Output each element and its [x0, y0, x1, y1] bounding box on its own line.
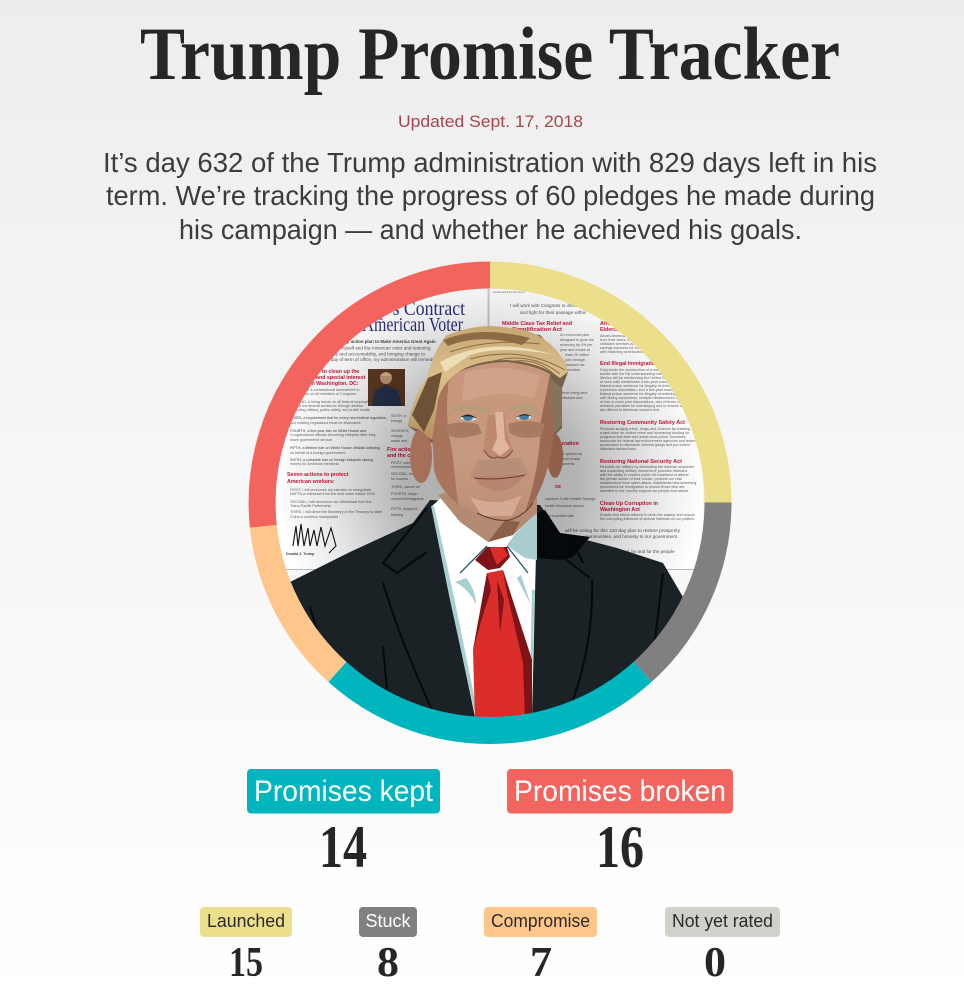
contract centre column: THIRD, cancel all	[391, 485, 420, 489]
contract left column: FIFTH, a lifetime ban on White House officials lobbying	[290, 446, 380, 450]
signature	[293, 524, 336, 553]
contract far-right column: from their taxes, incentivizes	[600, 338, 647, 342]
necktie	[460, 546, 532, 720]
contract left column: money for American elections.	[290, 462, 339, 466]
contract centre column: SECOND, begin	[391, 472, 418, 476]
contract right column: year and create at	[560, 348, 590, 352]
stat: launched: Launched	[207, 911, 285, 931]
contract far-right column: Washington Act	[600, 507, 640, 513]
contract centre column: FOURTH, begin	[391, 492, 417, 496]
contract far-right column: Fully-funds the construction of a wall on our southern	[600, 368, 686, 372]
contract far-right column: a task force on violent crime and increasing funding for	[600, 431, 690, 435]
neck	[438, 492, 537, 542]
contract left column: Congressional officials becoming lobbyists after they	[290, 433, 376, 437]
updated date: Updated Sept. 17, 2018	[398, 112, 583, 131]
contract far-right column: a previous deportation, and a five-year mandatory	[600, 388, 682, 392]
contract right column: and options for	[558, 452, 583, 456]
stat: not yet rated: Not yet rated	[672, 911, 773, 931]
head shadow on document	[276, 289, 703, 570]
contract heading: Trump’s Contract	[340, 298, 465, 320]
ring: compromise	[263, 526, 337, 672]
contract right column: from being sent	[562, 391, 587, 395]
contract far-right column: federal prison sentence for illegally re-entering for	[600, 392, 682, 396]
stat: not yet rated: 0	[704, 940, 726, 986]
contract far-right column: with the ability to receive public VA treatment or attend	[600, 473, 688, 477]
contract right column: continued from the front	[493, 290, 525, 294]
ring: kept	[337, 672, 643, 730]
contract right column: An economic plan	[560, 333, 589, 337]
hair top	[408, 326, 568, 440]
contract left column: two existing regulations must be eliminated.	[290, 421, 361, 425]
contract right column: replaces it with Health Savings	[545, 497, 595, 501]
contract far-right column: Reduces surging crime, drugs and violence by creating	[600, 427, 690, 431]
contract right column: Simplification Act	[512, 327, 562, 333]
small photo	[368, 369, 405, 406]
contract far-right column: with matching contributions	[600, 350, 645, 354]
stat: promises broken: 16	[596, 814, 644, 880]
contract right column	[493, 290, 681, 554]
contract far-right column	[600, 321, 697, 521]
contract centre column: and the co	[387, 453, 414, 459]
contract heading: the American Voter	[340, 314, 463, 336]
contract far-right column: Allows Americans to deduct	[600, 334, 645, 338]
contract far-right column: Eldercare Act	[600, 327, 634, 333]
shirt	[432, 490, 537, 717]
contract far-right column: resources for federal law enforcement agencies and federal	[600, 439, 697, 443]
mouth	[474, 474, 525, 491]
contract right column: ucation	[560, 441, 579, 447]
contract far-right column: border with the full understanding that the country	[600, 372, 681, 376]
contract centre column: water and	[391, 439, 407, 443]
contract left column: in Washington, DC:	[310, 381, 359, 387]
contract centre column: FIFTH, suspend	[391, 507, 417, 511]
contract far-right column: infrastructure from cyber-attack; establishes new screening	[600, 481, 696, 485]
contract right column: and fight for their passage within	[520, 310, 587, 315]
contract centre column: training	[391, 513, 403, 517]
contract left column: propose a constitutional amendment to	[296, 388, 360, 392]
stat: promises kept: Promises kept	[254, 775, 434, 808]
contract left column: Seven actions to protect	[287, 472, 349, 478]
face	[432, 362, 554, 520]
contract centre column: for Access	[391, 477, 408, 481]
contract left column	[286, 339, 444, 556]
contract far-right column: Affordable Childcare	[600, 321, 652, 327]
contract left column: between myself and the American voter and restoring	[322, 346, 431, 350]
ring: stuck	[643, 502, 718, 672]
contract centre column: energy	[391, 419, 402, 423]
contract left column: first day of term of office, my administration will immediately	[322, 357, 444, 362]
stat: compromise: 7	[530, 940, 552, 986]
contract far-right column: of such wall; establishes a two-year mandatory	[600, 380, 677, 384]
contract centre column: SIXTH, a	[391, 414, 407, 418]
donut ring	[262, 275, 718, 730]
contract right column: school choice	[558, 457, 580, 461]
stat: not yet rated	[665, 907, 780, 986]
contract far-right column: programs that train and assist local police; increases	[600, 435, 686, 439]
contract left column: THIRD, a requirement that for every new federal regulation,	[290, 416, 387, 420]
title: Trump Promise Tracker	[140, 13, 840, 96]
stat: stuck: 8	[377, 940, 399, 986]
intro text: his campaign — and whether he achieved his goals.	[179, 214, 802, 245]
stat: stuck	[359, 907, 417, 986]
contract far-right column: federal prison sentence for illegally re-entering	[600, 384, 676, 388]
contract far-right column: childcare services and creates	[600, 342, 650, 346]
contract left column: NAFTA or withdraw from the deal under Article 2205	[290, 492, 375, 496]
contract left column: reduce the federal workforce through attrition	[290, 404, 363, 408]
contract right column: massive tax	[565, 363, 585, 367]
contract left column: excluding military, public safety, and public health	[290, 408, 370, 412]
contract far-right column: Rebuilds our military by eliminating the defense sequester	[600, 465, 695, 469]
contract left column: term limits on all members of Congress	[292, 392, 356, 396]
contract far-right column: enhance penalties for overstaying and to ensure open	[600, 404, 688, 408]
lapel lines	[310, 508, 663, 712]
contract right column: designed to grow the	[560, 338, 594, 342]
stat: launched: 15	[229, 940, 263, 986]
contract far-right column: prosecutors to dismantle criminal gangs and put violent	[600, 443, 690, 447]
contract left column: FOURTH, a five-year ban on White House and	[290, 429, 366, 433]
contract right column: of, by and for the people	[625, 549, 675, 554]
contract left column: 100-day action plan to Make America Great Again	[333, 339, 436, 344]
intro text	[103, 147, 877, 245]
contract left column: SECOND, a hiring freeze on all federal employees	[290, 400, 372, 404]
ring: broken	[262, 275, 490, 526]
contract far-right column: or two or more prior deportations; also reforms visa	[600, 400, 684, 404]
contract left column: leave government service.	[290, 438, 333, 442]
contract left column: Donald J. Trump	[286, 552, 315, 556]
stat: stuck: Stuck	[366, 911, 411, 931]
contract centre column: SEVENTH,	[391, 429, 409, 433]
contract centre column: FIRST, cancel	[391, 461, 414, 465]
stat: compromise	[484, 907, 597, 986]
contract right column: economy by 4% per	[560, 343, 593, 347]
contract centre column: change	[391, 434, 403, 438]
contract centre column	[387, 414, 424, 517]
contract far-right column: Clean Up Corruption in	[600, 501, 658, 507]
contract right column: reduction	[565, 368, 580, 372]
document backdrop	[276, 289, 703, 570]
hair back and sides	[408, 327, 568, 445]
stat: launched	[200, 907, 292, 986]
stat: promises kept: 14	[319, 814, 367, 880]
contract right column: ce	[555, 484, 561, 490]
ring: launched	[490, 275, 718, 502]
stat: promises broken: Promises broken	[514, 775, 726, 808]
contract right column: will be voting for this 100-day plan to restore prosperity	[565, 528, 681, 533]
contract far-right column: Mexico will be reimbursing the United States for	[600, 376, 679, 380]
contract left column: Trans-Pacific Partnership	[290, 504, 331, 508]
intro text: term. We’re tracking the progress of 60 pledges he made during	[106, 180, 875, 211]
shirt edge shading	[431, 506, 590, 710]
contract far-right column: Restoring Community Safety Act	[600, 420, 685, 426]
contract right column: least 25 million	[565, 353, 589, 357]
stat: compromise: Compromise	[491, 911, 590, 931]
contract far-right column: are offered to American workers first.	[600, 408, 660, 412]
contract right column: to parents	[558, 462, 575, 466]
contract far-right column: with felony convictions, multiple misdemeanor convictions	[600, 396, 694, 400]
contract left column: honesty and accountability, and bringing change to	[322, 352, 426, 356]
contract far-right column: savings accounts for both	[600, 346, 642, 350]
contract far-right column: Enacts new ethics reforms to drain the swamp and reduce	[600, 513, 695, 517]
portrait illustration	[276, 289, 703, 760]
contract heading	[362, 302, 465, 332]
contract right column: I will work with Congress to introduce	[510, 303, 586, 308]
contract far-right column: offenders behind bars.	[600, 447, 637, 451]
contract centre column: memorandum	[391, 465, 414, 469]
eyes	[459, 414, 533, 421]
contract left column: American workers:	[287, 479, 335, 485]
contract far-right column: and expanding military investment; provides Veterans	[600, 469, 687, 473]
contract far-right column: End Illegal Immigration Act	[600, 361, 668, 367]
contract left column: FIRST, I will announce my intention to renegotiate	[290, 488, 371, 492]
contract right column: Middle Class Tax Relief and	[502, 321, 572, 327]
contract right column: jobs through	[564, 358, 585, 362]
contract far-right column: Restoring National Security Act	[600, 459, 682, 465]
eyebrows	[447, 403, 542, 417]
contract left column: China a currency manipulator	[290, 515, 339, 519]
intro text: It’s day 632 of the Trump administration with 829 days left in his	[103, 147, 877, 178]
face shading	[432, 368, 554, 520]
contract right column: health insurance across	[545, 504, 584, 508]
stat: promises kept	[247, 769, 440, 880]
contract centre column: Fire actions	[387, 447, 417, 453]
contract far-right column: procedures for immigration to ensure those who are	[600, 485, 684, 489]
contract right column: offshore and	[562, 396, 582, 400]
contract left column: SIXTH, a complete ban on foreign lobbyists raising	[290, 458, 373, 462]
contract left column: THIRD, I will direct the Secretary of the Treasury to label	[290, 510, 382, 514]
contract far-right column: the corrupting influence of special interests on our politics.	[600, 517, 695, 521]
contract far-right column: the private doctor of their choice; protects our vital	[600, 477, 682, 481]
contract centre column: unlawful immigrants	[391, 497, 424, 501]
ears	[410, 429, 563, 483]
contract far-right column: admitted to our country support our people and values	[600, 489, 689, 493]
nose	[484, 412, 513, 458]
contract left column: on behalf of a foreign government.	[290, 451, 346, 455]
contract left column: SECOND, I will announce our withdrawal from the	[290, 500, 372, 504]
contract right column: communities, and honesty to our government.	[585, 534, 678, 539]
stat: promises broken	[507, 769, 733, 880]
contract left column: to clean up the	[322, 369, 359, 375]
contract left column: and special interest	[316, 375, 366, 381]
contract right column: and expedite safe	[545, 514, 574, 518]
suit jacket	[290, 500, 683, 716]
